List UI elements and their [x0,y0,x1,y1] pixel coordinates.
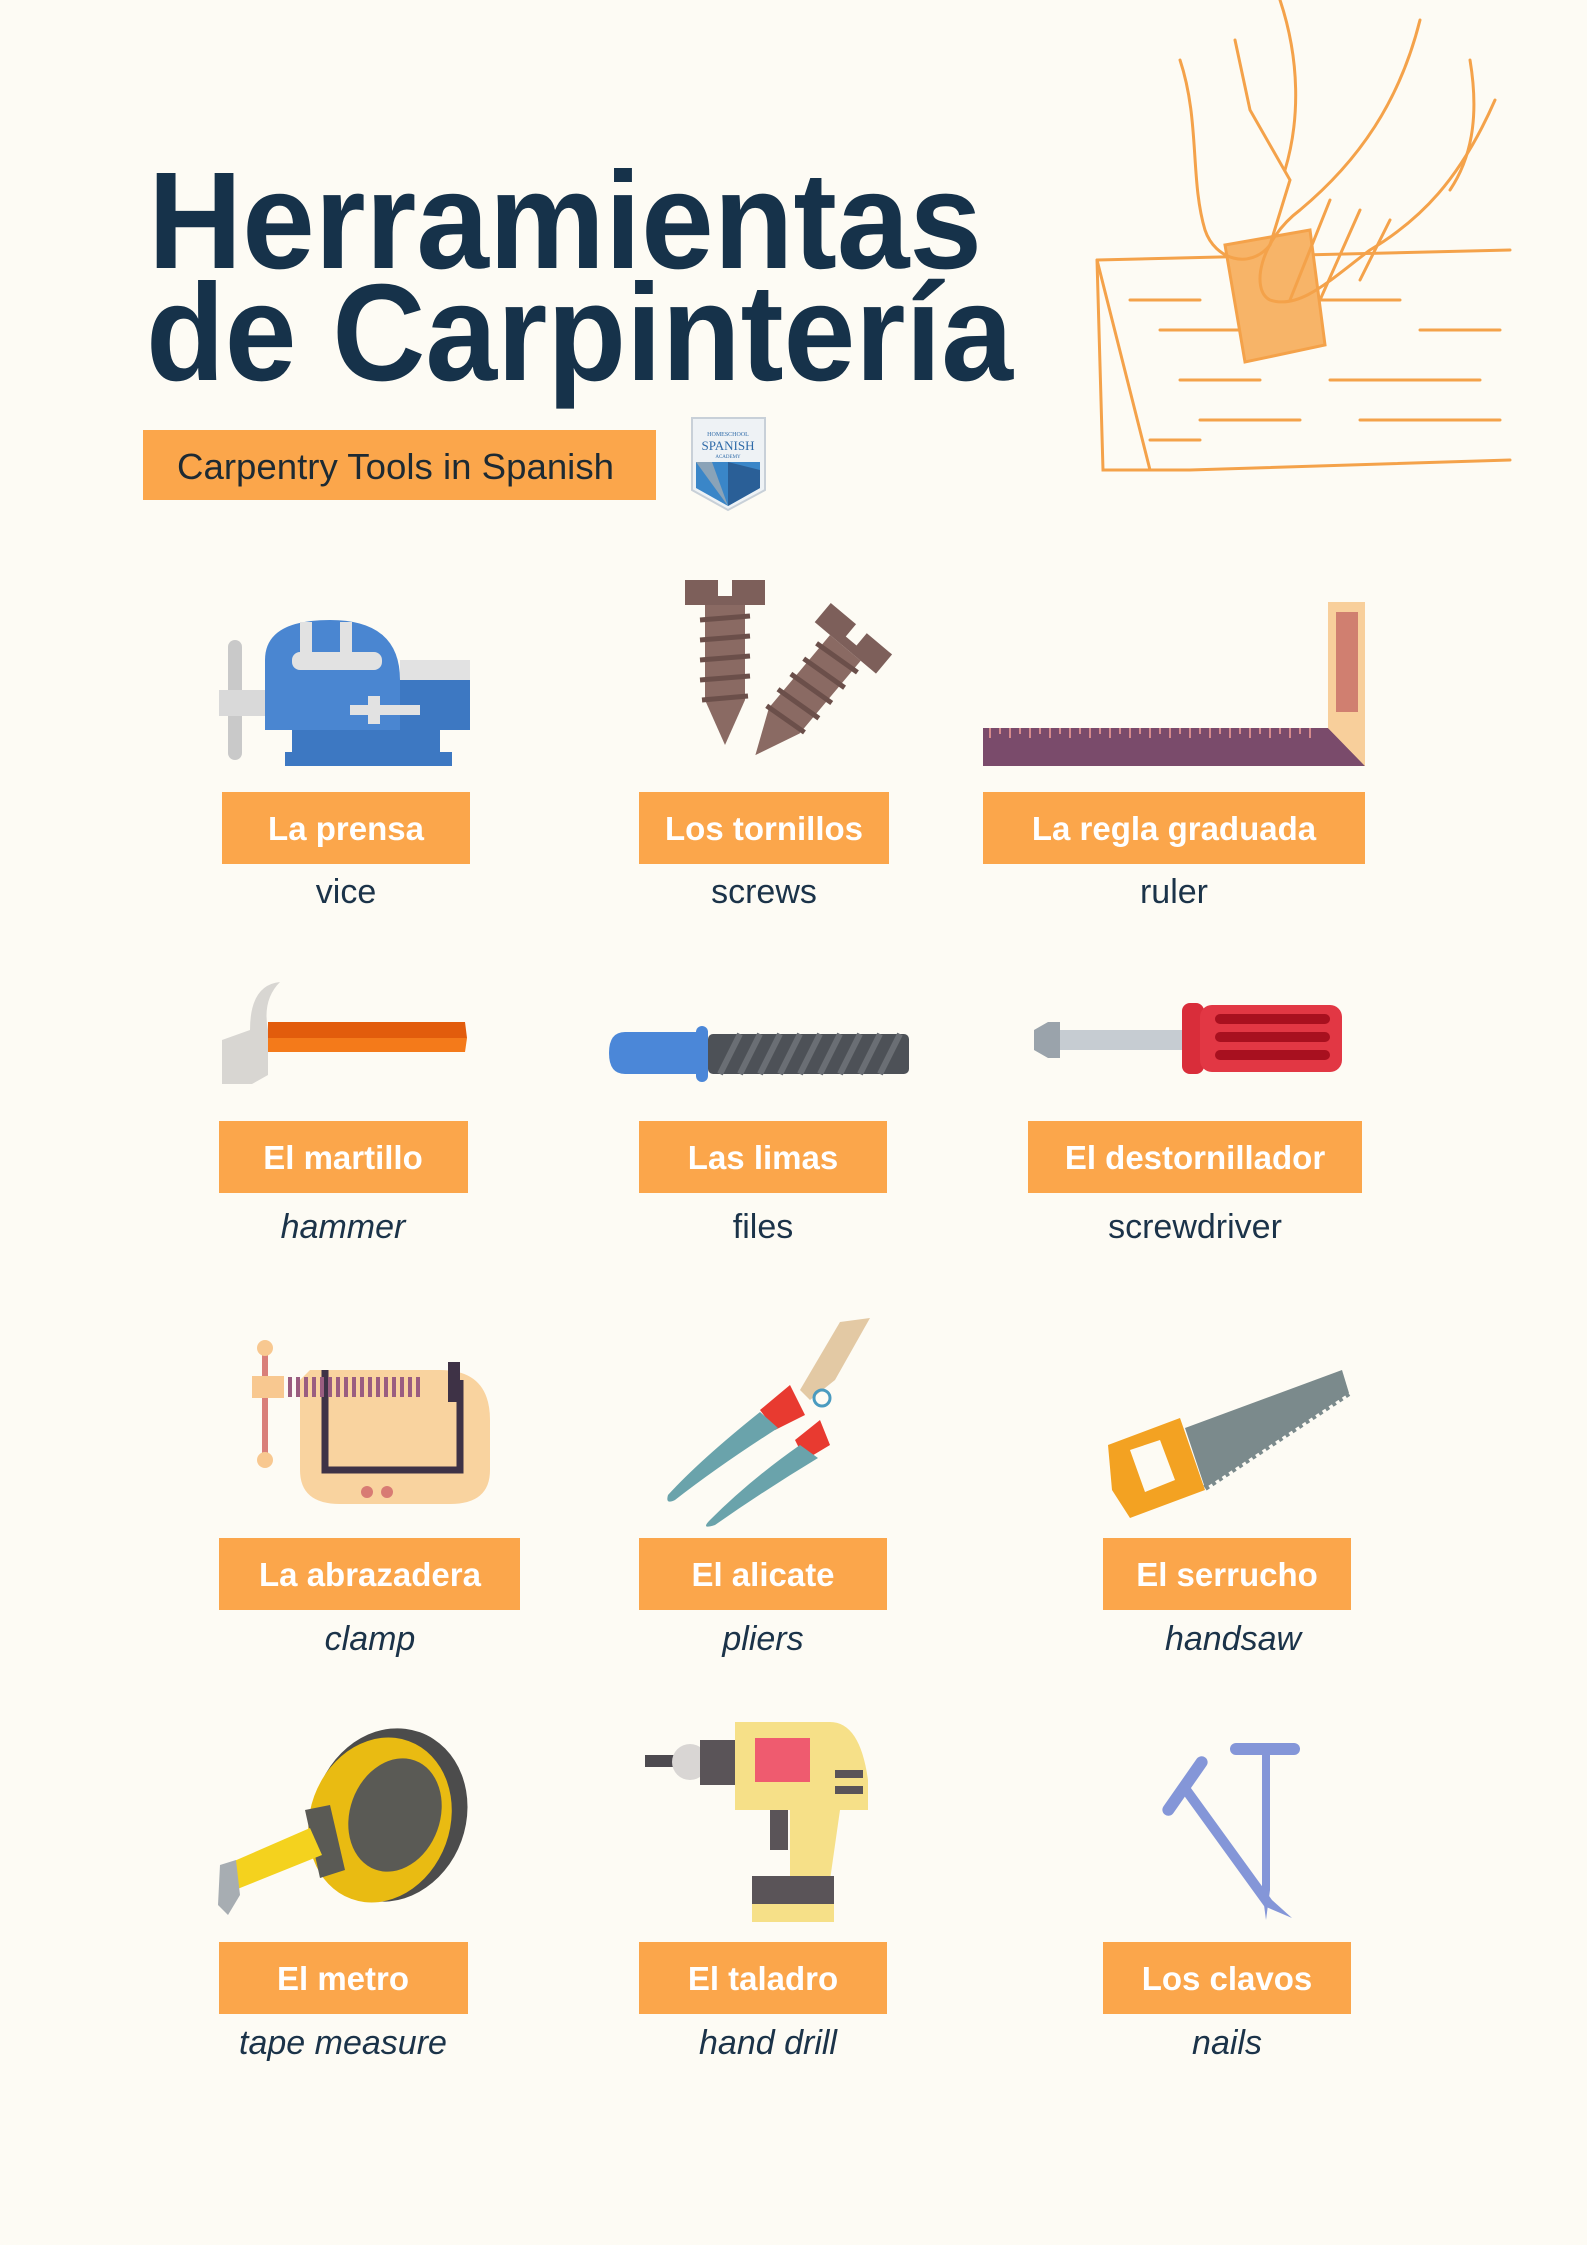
subtitle banner [143,430,656,500]
tool: hand drill [645,1722,868,1922]
label row 3: clamp [325,1620,415,1658]
label row 1: screws [711,873,817,911]
title: de Carpintería [146,256,1014,410]
label row 3: El alicate [691,1556,835,1593]
tool: tape measure [218,1706,492,1924]
title: Herramientas [148,144,982,298]
tool: pliers [667,1318,870,1527]
label row 1 [222,792,1365,911]
label row 1: vice [316,873,376,911]
label row 2 [219,1121,1362,1246]
tool: clamp [252,1340,490,1504]
tool: hammer [222,982,467,1084]
logo: SPANISH [702,438,754,453]
title [146,144,1014,410]
label row 4: hand drill [699,2024,838,2062]
label row 4 [219,1942,1351,2062]
tool: handsaw [1108,1370,1349,1518]
label row 4: nails [1192,2024,1262,2062]
label row 3: El serrucho [1136,1556,1318,1593]
label row 2: El martillo [263,1139,423,1176]
tool: nails [1160,1743,1300,1920]
label row 2: files [733,1208,793,1246]
label row 3: handsaw [1165,1620,1303,1658]
tool: vice [219,620,470,766]
label row 2: Las limas [688,1139,838,1176]
label row 1: Los tornillos [665,810,863,847]
subtitle banner: Carpentry Tools in Spanish [177,446,614,487]
label row 2: El destornillador [1065,1139,1325,1176]
logo: ACADEMY [715,455,741,460]
label row 3 [219,1538,1351,1658]
label row 2: hammer [281,1208,407,1246]
label row 3: La abrazadera [259,1556,482,1593]
tool: ruler [983,602,1365,766]
illustration: hands sanding wood [1097,0,1510,470]
label row 1: La prensa [268,810,425,847]
label row 1: La regla graduada [1032,810,1317,847]
label row 2: screwdriver [1108,1208,1282,1246]
logo [692,418,765,510]
label row 4: tape measure [239,2024,447,2062]
label row 4: El metro [277,1960,409,1997]
label row 1: ruler [1140,873,1208,911]
tool: screwdriver [1034,1003,1342,1074]
label row 3: pliers [721,1620,804,1658]
tool: file [609,1026,909,1082]
logo: HOMESCHOOL [707,432,749,438]
tool: screws [685,578,893,781]
label row 4: Los clavos [1142,1960,1312,1997]
label row 4: El taladro [688,1960,838,1997]
